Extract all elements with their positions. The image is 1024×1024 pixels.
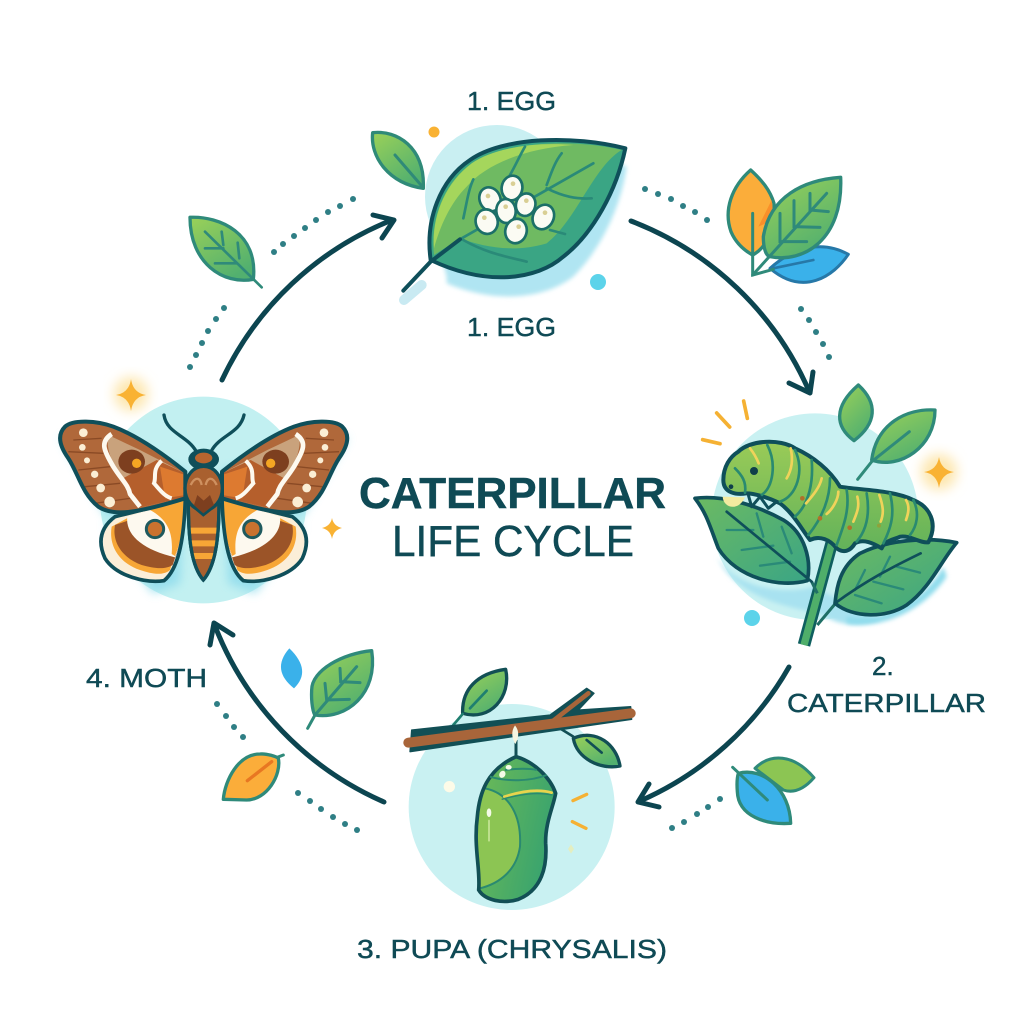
top small leaf	[840, 385, 872, 441]
icon: leaves bottom right	[733, 758, 814, 824]
arrow: caterpillar to pupa	[638, 667, 789, 807]
orange leaf	[728, 170, 774, 255]
icon: caterpillar on leaves	[695, 385, 957, 645]
label: 1. Egg top: 1. EGG	[467, 86, 556, 116]
icon: leaf top left	[190, 217, 262, 287]
title	[359, 469, 666, 566]
leaf blade	[429, 140, 625, 277]
title line 1: CATERPILLAR	[359, 469, 666, 518]
dot: caterpillar blue	[744, 610, 760, 626]
right leaf	[835, 540, 957, 615]
icon: leaves bottom left	[223, 648, 373, 800]
silk thread	[512, 725, 518, 758]
label: 2. Caterpillar	[787, 651, 986, 718]
sparkle: moth top	[114, 377, 148, 411]
pupa background circle	[409, 704, 615, 910]
top leaf	[463, 669, 507, 715]
moth antennae	[164, 415, 244, 451]
icon: egg leaf	[403, 125, 627, 300]
icon: moth	[60, 397, 348, 603]
label: 2. Caterpillar: CATERPILLAR	[787, 688, 986, 718]
egg cluster	[473, 174, 558, 246]
left leaf	[695, 498, 809, 583]
arrow: moth to egg	[222, 215, 394, 380]
icon: small leaf near egg	[372, 132, 423, 188]
stem	[804, 543, 835, 645]
white dot	[444, 781, 455, 792]
wing pair right	[222, 422, 347, 581]
label: 4. Moth: 4. MOTH	[86, 663, 207, 693]
motion dashes	[703, 401, 747, 444]
chrysalis	[476, 757, 556, 901]
faint sparkle	[568, 844, 574, 854]
caterpillar body	[723, 442, 933, 551]
right leaf	[573, 735, 620, 767]
moth background circle	[100, 397, 307, 603]
shine dashes	[572, 794, 587, 828]
leaf stem	[403, 239, 460, 291]
nibble mark	[723, 497, 745, 507]
label: 1. Egg bottom: 1. EGG	[467, 312, 556, 342]
wing pair left	[60, 422, 185, 581]
dotted accents	[187, 186, 832, 833]
icon: leaf cluster top right	[728, 170, 848, 282]
blue drop leaf	[281, 648, 302, 688]
moth body	[185, 449, 222, 580]
green leaf	[763, 177, 841, 258]
orange leaf	[223, 754, 279, 800]
sparkle: caterpillar	[921, 454, 957, 490]
title line 2: LIFE CYCLE	[392, 517, 634, 566]
dot: blue	[590, 274, 606, 290]
leaf veins	[460, 147, 593, 262]
caterpillar background circle	[712, 413, 918, 620]
green leaf	[312, 651, 373, 716]
sparkle: moth side	[322, 518, 342, 539]
arrow: egg to caterpillar	[631, 221, 813, 393]
right small leaf	[872, 410, 935, 462]
icon: pupa on branch	[408, 669, 632, 910]
label: 2. Caterpillar: 2.	[872, 651, 894, 681]
blue leaf	[770, 247, 848, 282]
arrow: pupa to moth	[210, 623, 384, 802]
branch	[408, 688, 632, 752]
dot: orange	[428, 126, 440, 138]
label: 3. Pupa: 3. PUPA (CHRYSALIS)	[357, 934, 667, 964]
